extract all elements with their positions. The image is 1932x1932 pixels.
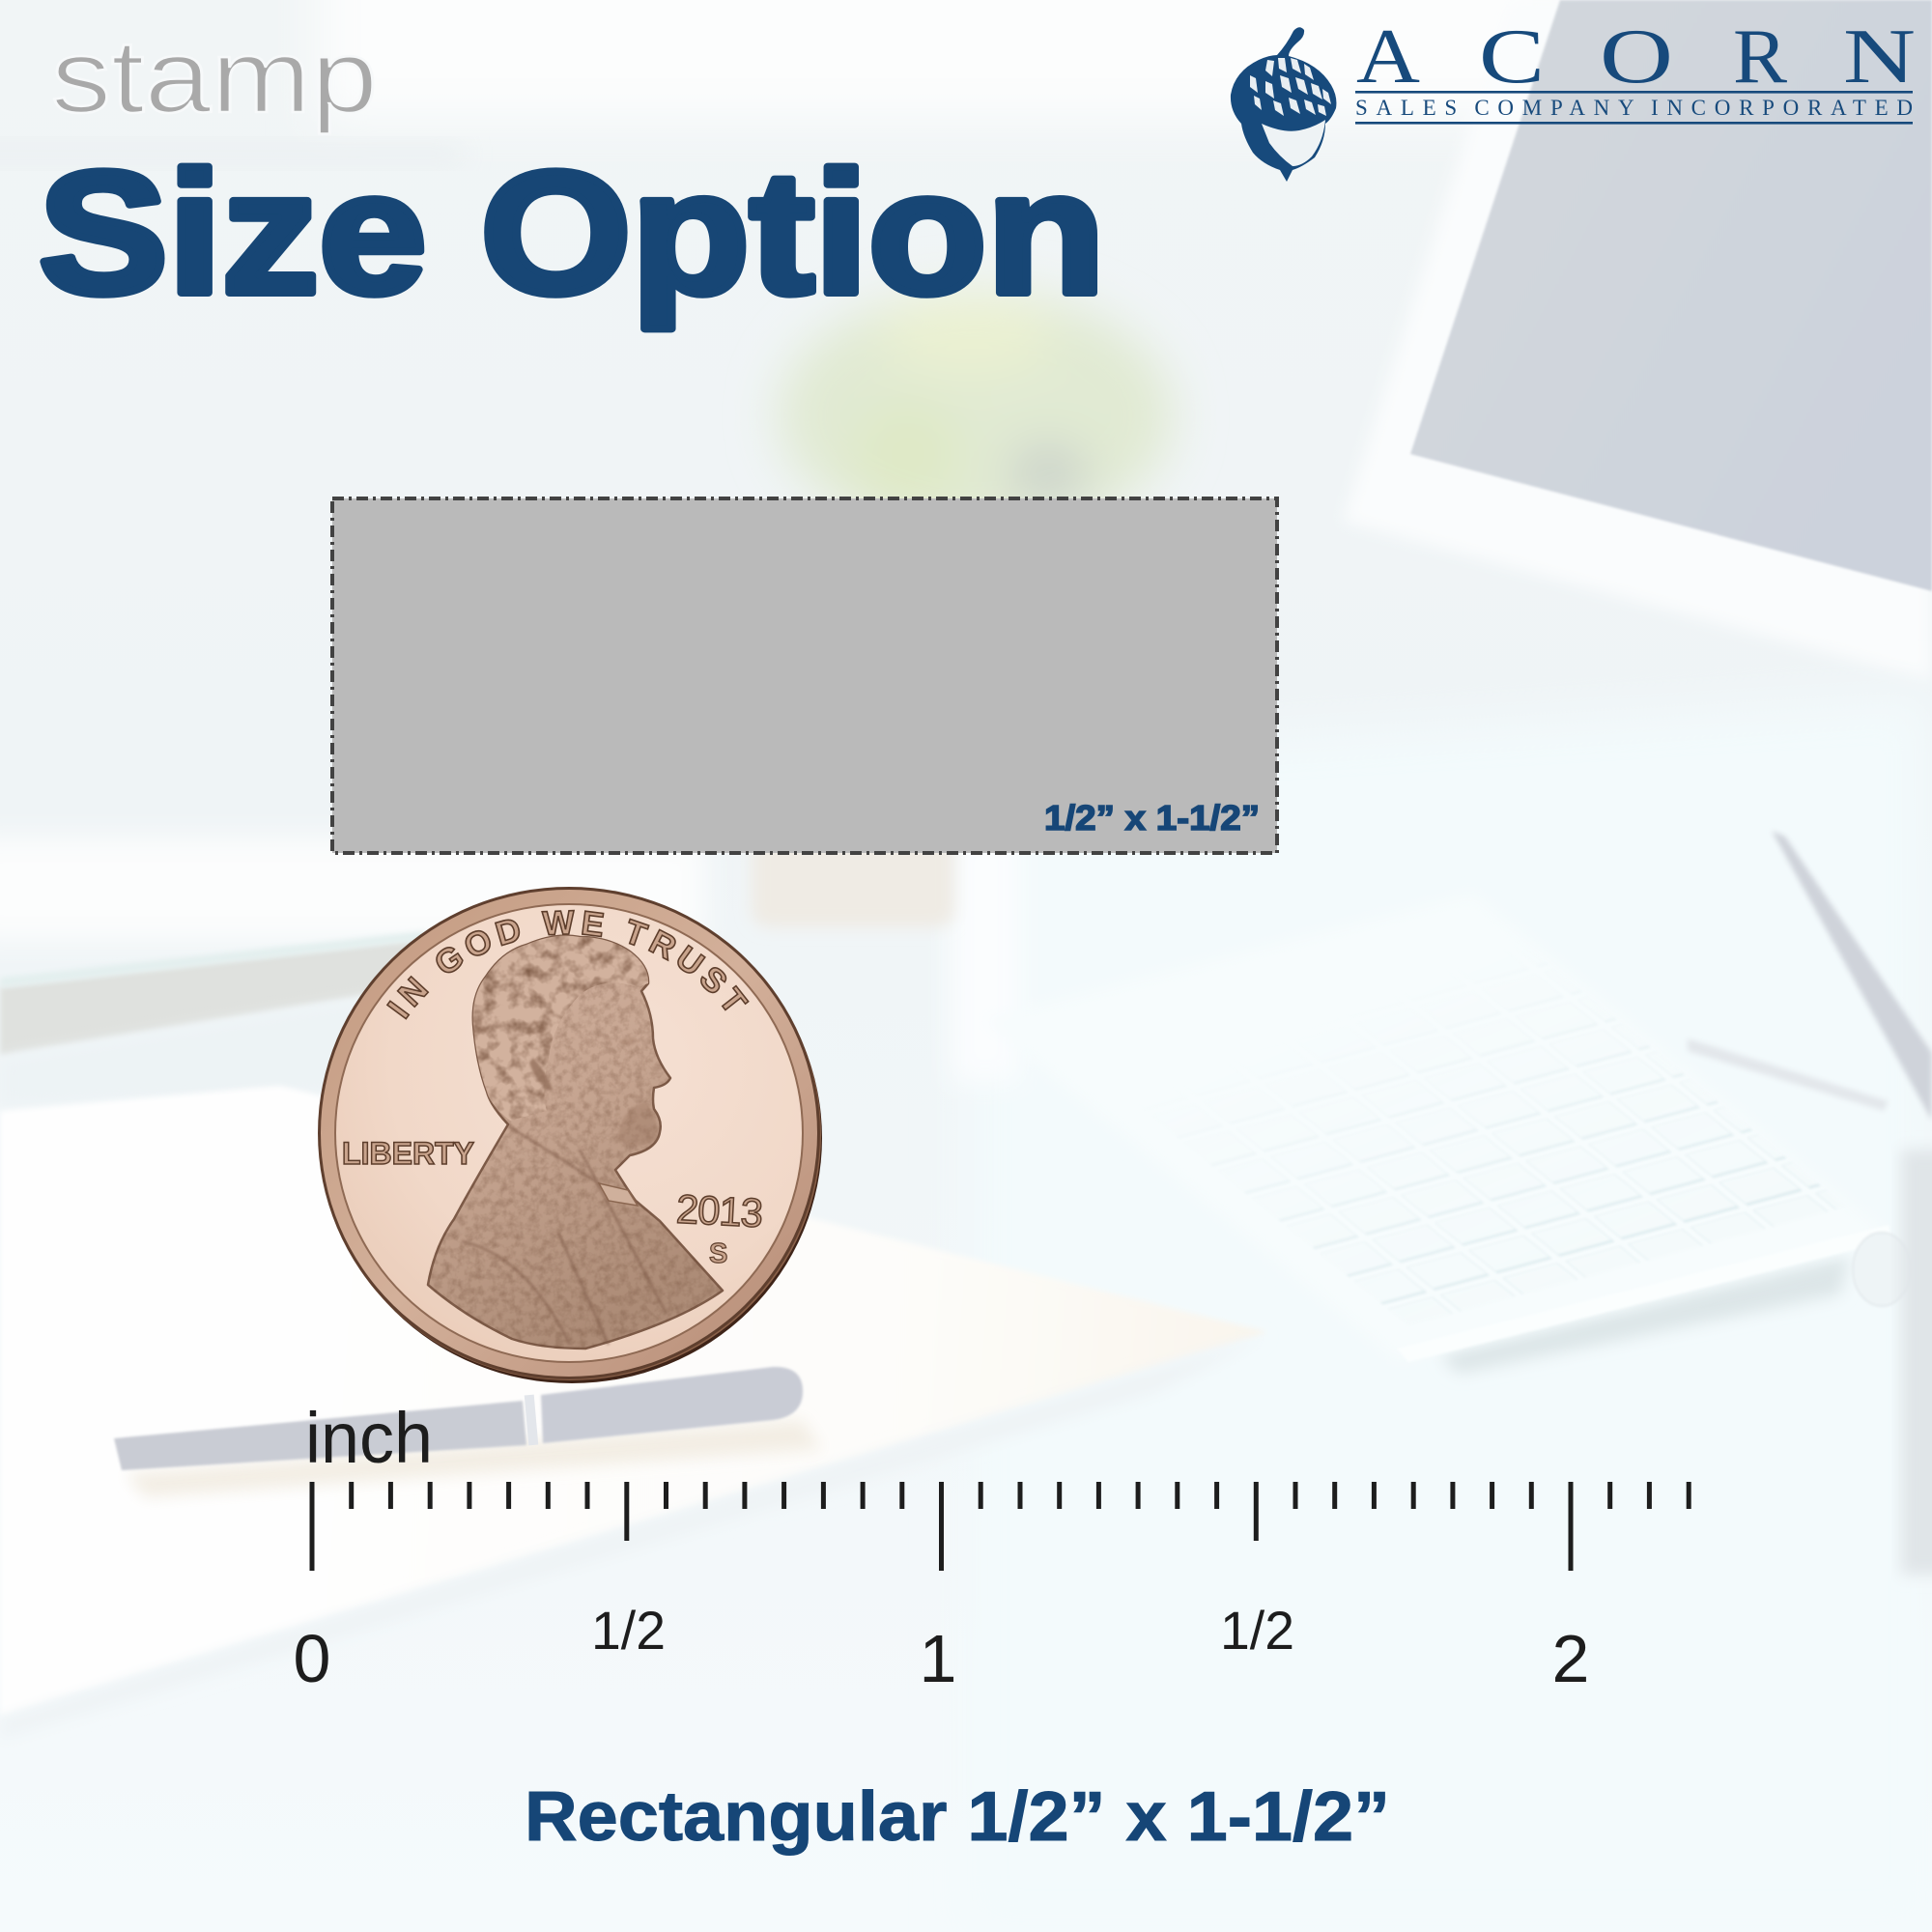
pen bbox=[114, 1367, 821, 1497]
heading: Size Option: Size Option bbox=[39, 136, 1105, 330]
ear bbox=[529, 1058, 553, 1091]
logo tagline: SALES COMPANY INCORPORATED bbox=[1355, 96, 1913, 120]
window sill bbox=[0, 838, 705, 1107]
icon: US penny for scale: LIBERTY bbox=[342, 1136, 474, 1171]
icon: US penny for scale: S bbox=[709, 1238, 727, 1269]
ruler numbers: 0 bbox=[294, 1621, 330, 1696]
ruler numbers: 1/2 bbox=[591, 1600, 666, 1661]
paper shadow edge bbox=[0, 1335, 1267, 1739]
ruler numbers bbox=[294, 1600, 1589, 1696]
icon: acorn bbox=[1231, 27, 1336, 182]
logo wordmark letters: A bbox=[1356, 14, 1420, 99]
Lincoln bust bbox=[428, 936, 723, 1349]
pencils and cup bbox=[1688, 831, 1932, 1575]
ruler numbers: 2 bbox=[1552, 1621, 1589, 1696]
monitor bbox=[1343, 0, 1932, 681]
hair bbox=[473, 936, 648, 1121]
plant bbox=[778, 290, 1174, 541]
icon: US penny for scale: 2013 bbox=[675, 1186, 764, 1236]
heading: stamp: stamp bbox=[51, 17, 378, 134]
caption: Rectangular size: Rectangular 1/2” x 1-1/2” bbox=[525, 1778, 1390, 1856]
logo wordmark letters: O bbox=[1600, 14, 1673, 99]
icon: US penny for scale bbox=[318, 887, 822, 1383]
coin inscription: IN GOD WE TRUST bbox=[386, 910, 750, 1020]
ruler ticks bbox=[312, 1482, 1689, 1571]
coat folds bbox=[462, 1126, 667, 1345]
desk right side bbox=[966, 696, 1932, 1932]
ruler label: inch: inch bbox=[305, 1398, 433, 1478]
size label: 1/2” x 1-1/2” bbox=[1044, 798, 1260, 838]
monitor stand bbox=[952, 831, 1019, 1082]
logo wordmark letters bbox=[1356, 14, 1916, 99]
logo wordmark letters: C bbox=[1479, 14, 1545, 99]
logo wordmark letters: R bbox=[1733, 14, 1788, 99]
panel: stamp size rectangle bbox=[332, 498, 1277, 853]
logo wordmark letters: N bbox=[1843, 14, 1916, 99]
plant pot bbox=[752, 831, 954, 927]
paper sheet bbox=[0, 1086, 1267, 1716]
keyboard bbox=[1319, 1101, 1896, 1374]
ruler bbox=[294, 1398, 1689, 1696]
logo: Acorn Sales Company bbox=[1231, 14, 1916, 182]
ruler numbers: 1/2 bbox=[1220, 1600, 1294, 1661]
bow tie bbox=[599, 1183, 638, 1206]
eye and beard bbox=[618, 1038, 658, 1146]
ruler numbers: 1 bbox=[920, 1621, 956, 1696]
